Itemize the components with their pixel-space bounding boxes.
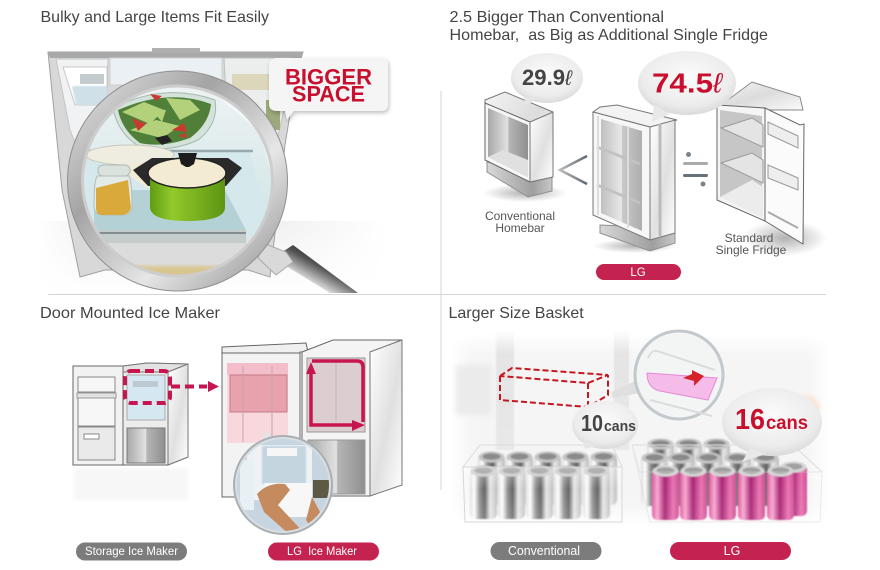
pink capacity arrows — [311, 361, 363, 425]
arrow heads — [306, 362, 365, 431]
panel: larger size basket — [448, 305, 822, 560]
callout: bigger space: SPACE — [292, 82, 365, 106]
approx equal sign — [683, 152, 708, 186]
jar — [94, 165, 132, 215]
green pot — [133, 153, 242, 221]
bubble 16 cans — [722, 388, 822, 462]
bubble 29.900: ℓ — [564, 67, 573, 90]
zoom circle: ice maker — [234, 430, 335, 535]
bubble 74.500 — [638, 51, 736, 122]
storage fridge reflection — [74, 468, 188, 500]
bubble 29.900 — [511, 53, 583, 107]
lens glare — [220, 98, 270, 169]
bubble 10 cans: cans — [604, 418, 636, 435]
bubble 74.500: ℓ — [712, 68, 724, 98]
badge: LG — [596, 264, 681, 280]
callout: bigger space: BIGGER — [285, 64, 372, 90]
storage ice maker fridge — [73, 363, 188, 465]
dividers — [48, 91, 826, 490]
label: conventional homebar: Homebar — [495, 221, 545, 235]
label: standard single fridge: Single Fridge — [716, 243, 787, 257]
callout connector — [612, 376, 645, 398]
pink cans tray — [632, 438, 822, 522]
zoom circle: basket — [635, 331, 723, 419]
heading: homebar: Homebar, as Big as Additional Single Fridge — [450, 27, 768, 44]
badge: storage ice maker: Storage Ice Maker — [85, 544, 178, 558]
label: standard single fridge: Standard — [725, 231, 773, 245]
fridge door background — [456, 330, 821, 515]
badge: conventional — [490, 542, 602, 560]
salad bowl — [113, 93, 216, 149]
badge: LG ice maker: LG Ice Maker — [287, 544, 357, 558]
heading: homebar: 2.5 Bigger Than Conventional — [450, 9, 664, 26]
badge: LG — [670, 542, 791, 560]
bubble 29.900: 29.9 — [522, 65, 565, 90]
LG ice maker fridge — [222, 340, 402, 497]
fridge open — [48, 48, 303, 277]
magnifier handle — [258, 243, 358, 293]
less-than sign — [560, 156, 587, 184]
bubble 74.500: 74.5 — [652, 68, 713, 98]
bubble 16 cans: cans — [766, 413, 808, 434]
floor reflection — [36, 221, 386, 293]
bubble 16 cans: 16 — [735, 404, 765, 436]
panel: door mounted ice maker — [40, 305, 402, 560]
bubble 10 cans: 10 — [581, 410, 603, 436]
badge: LG ice maker — [268, 542, 379, 560]
magnifier lens view — [80, 85, 278, 280]
magnifier ring — [68, 71, 288, 291]
panel: homebar — [450, 9, 827, 280]
badge: LG: LG — [630, 267, 646, 279]
bubble 10 cans — [572, 401, 638, 449]
plate under bowl — [86, 145, 174, 165]
dashed highlight and arrow — [125, 371, 207, 403]
callout: bigger space — [269, 58, 389, 122]
dashed basket outline — [500, 368, 608, 407]
silver cans tray — [463, 445, 622, 522]
conventional homebar — [483, 92, 567, 202]
standard single fridge — [717, 82, 827, 256]
panel: bulky and large items — [36, 9, 389, 293]
label: conventional homebar: Conventional — [485, 209, 555, 223]
arrow head — [208, 381, 219, 392]
heading: bulky items: Bulky and Large Items Fit Easily — [40, 9, 269, 26]
LG homebar — [593, 105, 677, 253]
badge: storage ice maker — [76, 542, 187, 560]
badge: LG: LG — [724, 544, 740, 558]
heading: ice maker: Door Mounted Ice Maker — [40, 305, 221, 322]
heading: basket: Larger Size Basket — [448, 305, 584, 322]
badge: conventional: Conventional — [508, 544, 580, 558]
